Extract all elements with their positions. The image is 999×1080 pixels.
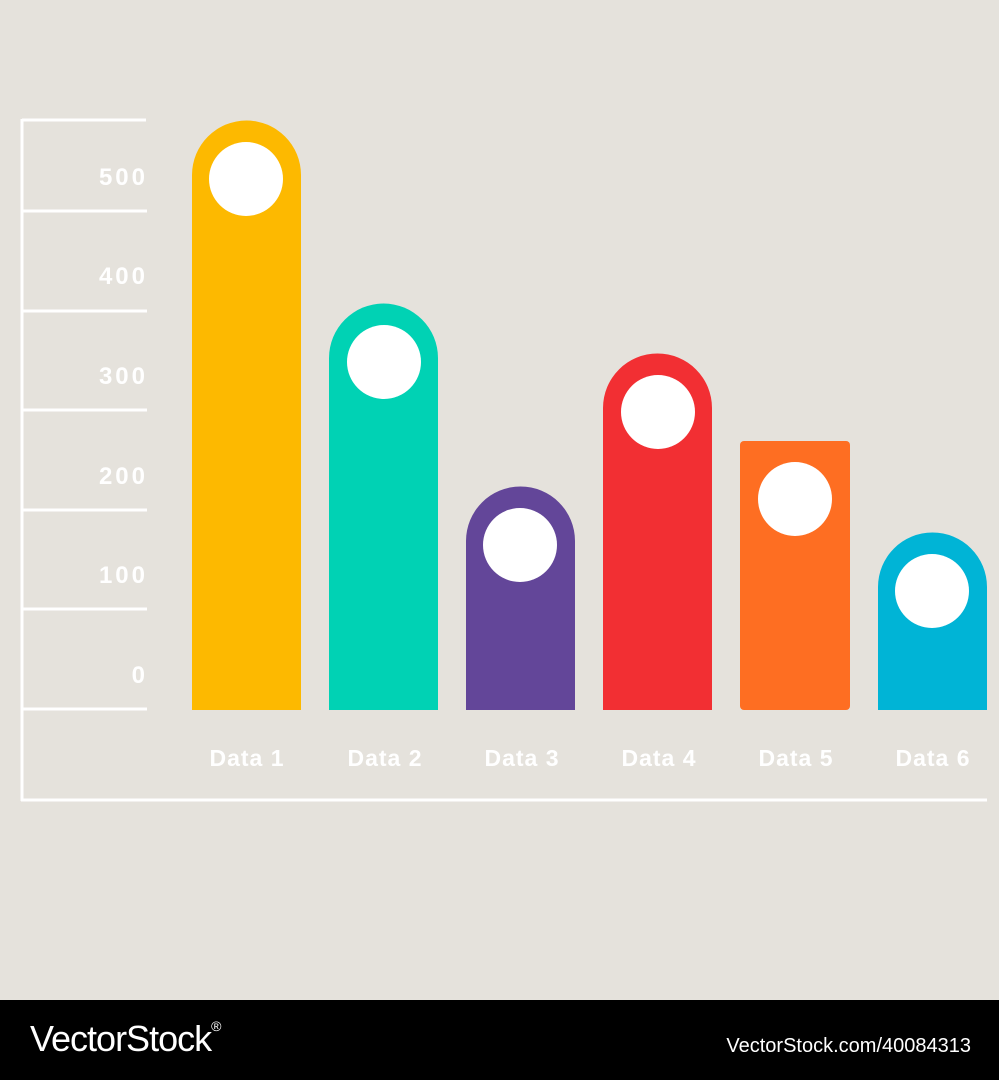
bar: Data 4 [603, 353, 712, 710]
bar: Data 6 [878, 532, 987, 710]
x-axis labels: Data 6 [895, 745, 971, 771]
x-axis labels [209, 745, 971, 771]
y-axis labels: 400 [99, 263, 148, 290]
y-axis labels: 200 [99, 463, 148, 490]
y-axis labels: 300 [99, 363, 148, 390]
y-axis labels: 500 [99, 164, 148, 191]
footer bar [0, 1000, 999, 1080]
x-axis labels: Data 4 [621, 745, 697, 771]
axes [21, 119, 987, 801]
bar: Data 3 [466, 486, 575, 710]
bar: Data 5 [740, 441, 850, 710]
y-axis labels [99, 164, 148, 689]
footer id: VectorStock.com/40084313 [726, 1035, 971, 1057]
x-axis labels: Data 2 [347, 745, 423, 771]
x-axis labels: Data 5 [758, 745, 834, 771]
footer brand: VectorStock® [30, 1018, 220, 1059]
bar: Data 1 [192, 121, 301, 710]
y-axis labels: 100 [99, 562, 148, 589]
y-axis labels: 0 [132, 662, 148, 689]
x-axis labels: Data 3 [484, 745, 560, 771]
x-axis labels: Data 1 [209, 745, 285, 771]
bar: Data 2 [329, 304, 438, 710]
